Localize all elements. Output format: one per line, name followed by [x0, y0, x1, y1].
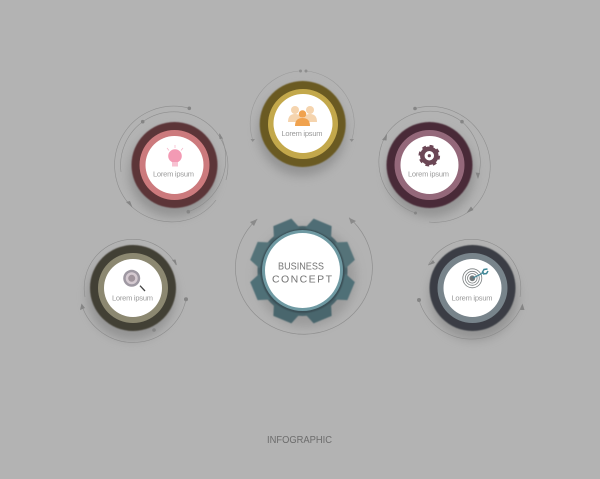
label: Lorem ipsum — [452, 294, 492, 303]
label: Lorem ipsum — [112, 294, 153, 303]
gear inner ring — [260, 229, 344, 313]
business label: BUSINESS — [278, 260, 324, 272]
orbit — [250, 71, 354, 140]
label: Lorem ipsum — [408, 170, 449, 179]
icon: cog — [420, 146, 439, 165]
top node: team — [250, 70, 354, 176]
orbits — [82, 239, 186, 342]
label: Lorem ipsum — [282, 129, 322, 138]
icon: magnifier — [123, 270, 145, 291]
icon: team — [288, 106, 317, 126]
orbits — [379, 107, 490, 222]
concept label: CONCEPT — [272, 274, 333, 286]
orbits — [115, 106, 228, 222]
center orbit arrows — [235, 218, 372, 334]
bottom-right node: target — [417, 239, 524, 340]
icon: target — [463, 269, 488, 288]
orbits — [419, 239, 522, 339]
gear white disc — [265, 233, 340, 308]
center gear: business concept — [235, 217, 372, 334]
bottom-left node: search — [80, 239, 188, 342]
icon: light bulb — [167, 145, 183, 166]
gear icon — [249, 217, 356, 325]
top-right node: settings — [379, 107, 490, 222]
top-left node: idea — [115, 106, 228, 222]
label: Lorem ipsum — [153, 170, 194, 178]
footer title: INFOGRAPHIC — [267, 435, 332, 446]
gear shadow — [256, 227, 356, 327]
